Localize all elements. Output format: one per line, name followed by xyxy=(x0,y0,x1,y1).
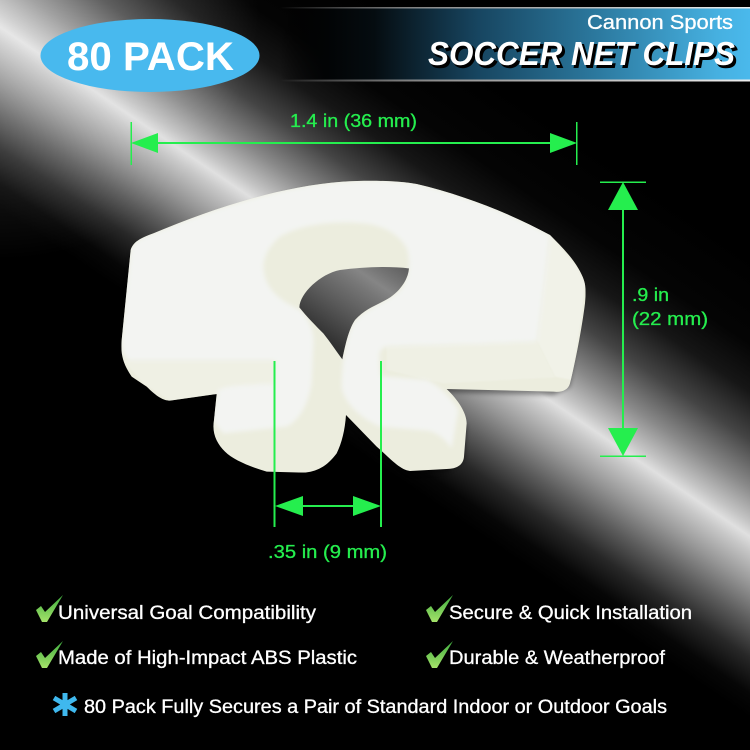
product: white net clip xyxy=(121,180,586,473)
dimension: width 1.4 in: 1.4 in (36 mm) xyxy=(290,111,417,131)
footnote: 80 pack coverage: 80 Pack Fully Secures a Pair of Standard Indoor or Outdoor Goals xyxy=(84,697,667,718)
clip top face xyxy=(122,181,550,448)
dimension: height .9 in: (22 mm) xyxy=(632,309,708,329)
dimension: height .9 in xyxy=(600,182,708,457)
brand name: Cannon Sports xyxy=(587,12,733,34)
clip side shading xyxy=(537,235,585,380)
feature: secure and quick installation: Secure & Quick Installation xyxy=(449,603,692,624)
feature: high-impact abs plastic: Made of High-Impact ABS Plastic xyxy=(58,648,357,669)
dimension: opening .35 in xyxy=(268,361,387,562)
product title: SOCCER NET CLIPS xyxy=(428,35,735,72)
product title: SOCCER NET CLIPS xyxy=(430,38,738,74)
feature: high-impact abs plastic xyxy=(36,641,357,669)
feature: secure and quick installation xyxy=(426,595,692,624)
dimension: height .9 in: .9 in xyxy=(632,285,669,305)
feature: durable and weatherproof: Durable & Weatherproof xyxy=(449,648,666,669)
header banner xyxy=(280,7,750,82)
badge: 80 pack xyxy=(40,19,260,92)
feature: durable and weatherproof xyxy=(426,641,666,669)
feature: universal goal compatibility xyxy=(36,595,317,624)
clip lower edge xyxy=(124,361,217,401)
feature: universal goal compatibility: Universal Goal Compatibility xyxy=(58,603,317,624)
badge: 80 pack: 80 PACK xyxy=(67,35,234,79)
clip body xyxy=(121,180,586,473)
dimension: opening .35 in: .35 in (9 mm) xyxy=(268,542,387,562)
dimension: width 1.4 in xyxy=(130,111,578,165)
